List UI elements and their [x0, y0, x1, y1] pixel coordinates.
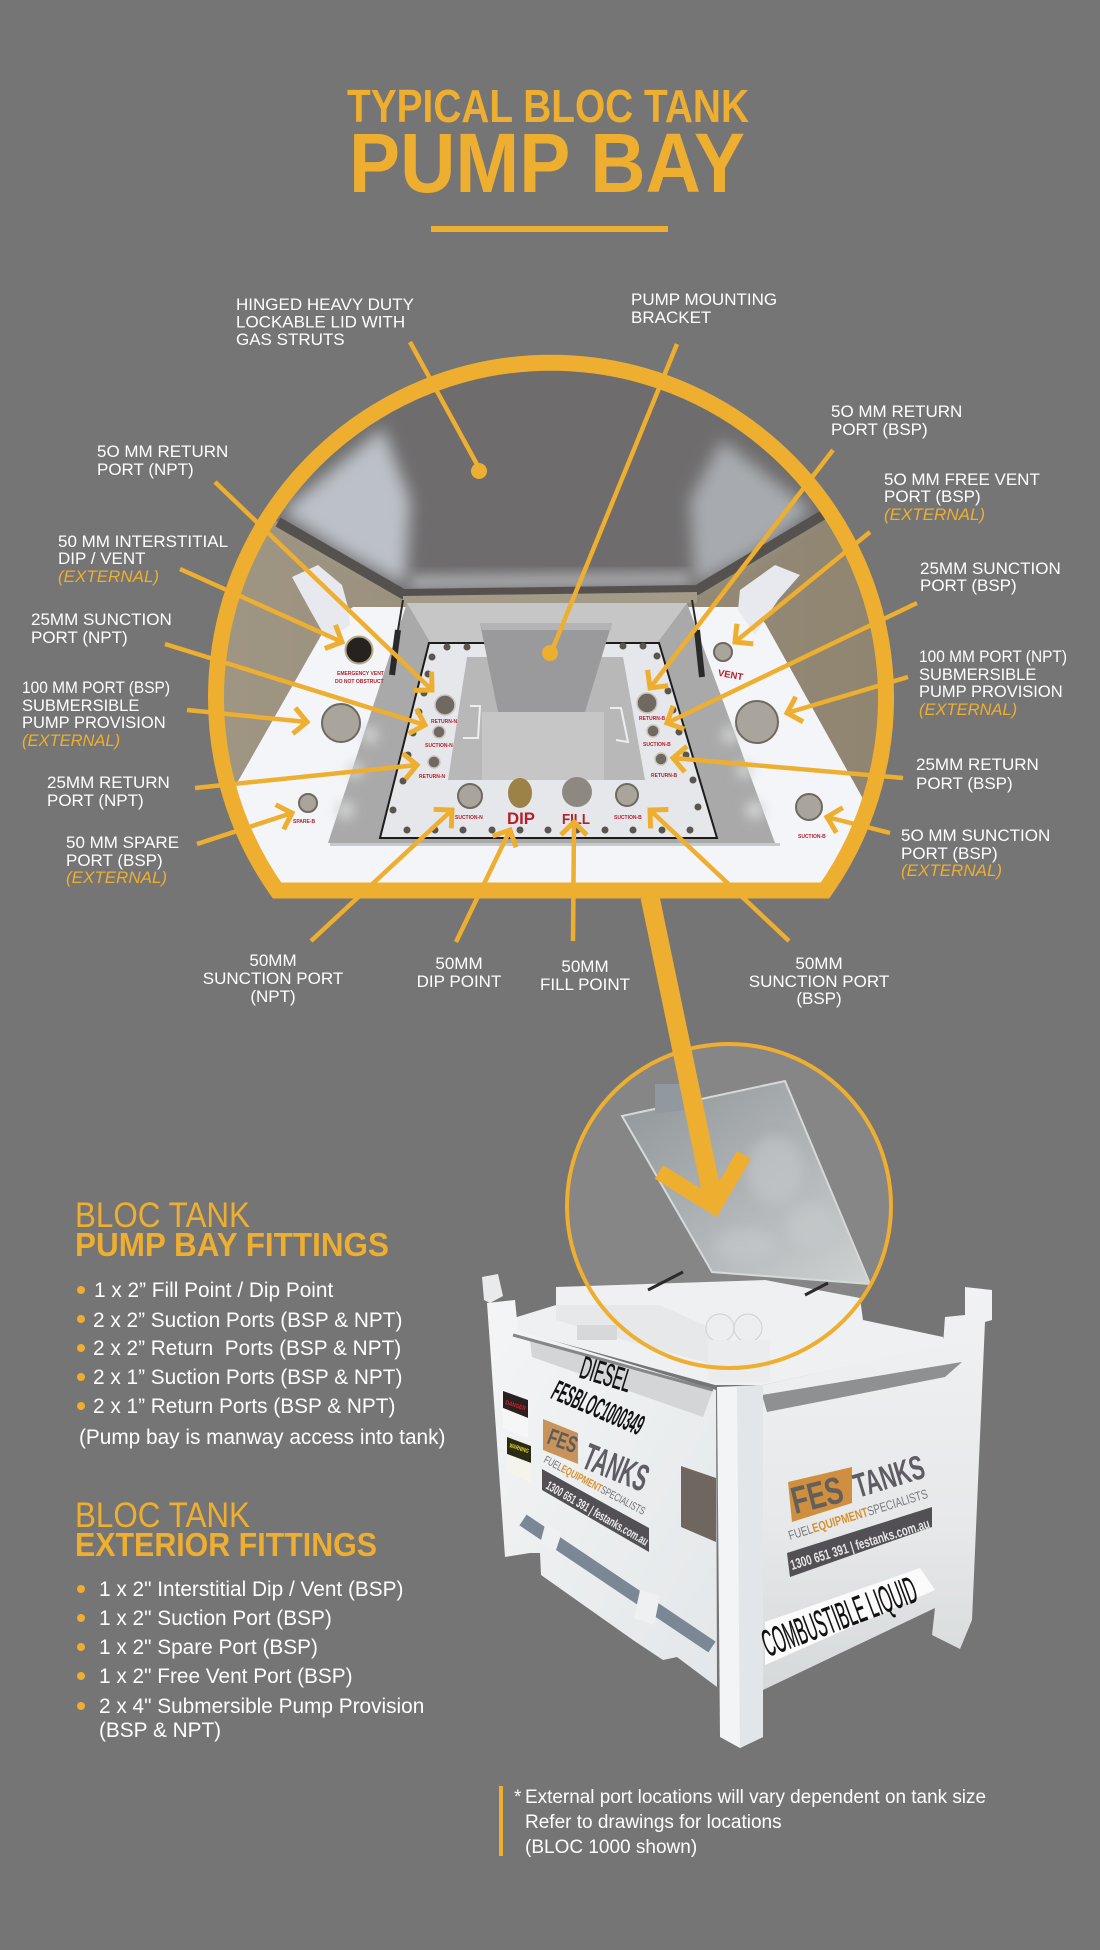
bullets [77, 1286, 85, 1410]
magnifier ring [567, 1044, 891, 1368]
label: suction NPT 50: SUNCTION PORT [203, 969, 343, 988]
arrow: dip [456, 830, 510, 942]
tank: pipe clamps [540, 1525, 660, 1625]
label: 100 mm NPT: SUBMERSIBLE [919, 666, 1036, 684]
tank: right shadow band [762, 1362, 962, 1412]
photo: well wall blobs [336, 727, 764, 819]
photo: small stencils: SUCTION-N [455, 815, 483, 821]
tank: right lower strip [765, 1568, 935, 1665]
label: suction BSP 50: 50MM [795, 954, 843, 973]
label: 100 mm NPT: (EXTERNAL) [919, 701, 1017, 719]
photo: emergency vent [346, 636, 372, 664]
footnote [514, 1787, 986, 1858]
photo: gas struts [392, 600, 702, 677]
label: hinged lid: GAS STRUTS [236, 330, 345, 349]
tank: deck recess shade [556, 1305, 715, 1365]
photo: handles [463, 706, 628, 742]
label: suction NPT 50: (NPT) [250, 987, 296, 1006]
heading: BLOC TANK [75, 1496, 250, 1535]
tank: logo FES right [788, 1467, 852, 1522]
panel: pump bay fittings [75, 1196, 445, 1449]
photo: open lid underside [276, 370, 820, 589]
photo: stencil VENT: VENT [717, 668, 744, 683]
photo: small fittings [428, 693, 667, 768]
arrow: return BSP 25 [673, 758, 903, 778]
tank text: DIESEL: DIESEL [576, 1349, 636, 1399]
labels: bottom [203, 951, 889, 1008]
tank: top deck [507, 1280, 945, 1385]
label: suction NPT 50: 50MM [249, 951, 297, 970]
labels: top [236, 290, 962, 439]
tank: warning panel [507, 1454, 531, 1483]
photo: tank opening [448, 657, 645, 780]
list text: 2 x 4" Submersible Pump Provision [99, 1695, 424, 1718]
label: return port BSP: 5O MM RETURN [831, 402, 962, 421]
photo: small stencils: RETURN-B [639, 716, 665, 722]
arrow: return BSP [650, 450, 833, 688]
label: suction BSP external: PORT (BSP) [901, 844, 998, 863]
lid panel [622, 1081, 870, 1284]
label: free vent: PORT (BSP) [884, 487, 981, 506]
photo: small stencils: DO NOT OBSTRUCT [335, 679, 384, 685]
label: interstitial: 50 MM INTERSTITIAL [58, 532, 228, 551]
label: 100 mm BSP: (EXTERNAL) [22, 732, 120, 750]
magnifier: opened lid [567, 1044, 891, 1368]
arrow: suction BSP [667, 603, 917, 723]
arrow: spare [197, 813, 292, 844]
list text: 2 x 2” Suction Ports (BSP & NPT) [93, 1309, 402, 1332]
tank: left grey band [530, 1340, 713, 1417]
photo: pump mounting bracket [480, 623, 612, 712]
arrow: 100 mm BSP [187, 710, 307, 722]
title: PUMP BAY [349, 116, 745, 210]
photo: lid hinge frame [278, 515, 823, 594]
label: suction BSP 25: PORT (BSP) [920, 576, 1017, 595]
label: return NPT 25: 25MM RETURN [47, 773, 170, 792]
label: spare port: (EXTERNAL) [66, 868, 167, 887]
photo: small stencils: SUCTION-B [643, 742, 671, 748]
arrow: interstitial [180, 569, 342, 642]
label: dip point: DIP POINT [417, 972, 501, 991]
tank text: FES left: FES [544, 1423, 581, 1458]
arrow: free vent [735, 532, 870, 642]
heading [75, 1496, 377, 1564]
list text: 2 x 2” Return Ports (BSP & NPT) [93, 1337, 401, 1360]
tank: compliance plate [681, 1466, 716, 1542]
title [347, 80, 749, 210]
labels: left side [22, 442, 228, 887]
label: pump mounting bracket: BRACKET [631, 308, 711, 327]
label: hinged lid: LOCKABLE LID WITH [236, 312, 405, 332]
labels: right side [884, 470, 1067, 880]
tank: centre post [717, 1385, 763, 1748]
title underline [431, 226, 668, 232]
arrow: return NPT [215, 482, 432, 690]
footnote: External port locations will vary dependent on tank size [525, 1787, 986, 1808]
pointer: lid [410, 342, 487, 479]
photo: deck step [330, 843, 780, 846]
photo: small stencils: SPARE-B [293, 819, 316, 825]
tank: phone bar right [787, 1507, 932, 1577]
label: dip point: 50MM [435, 954, 483, 973]
footnote: * [514, 1787, 522, 1808]
label: suction BSP 25: 25MM SUNCTION [920, 559, 1061, 578]
photo: lid lip [403, 592, 697, 606]
list text: 1 x 2" Free Vent Port (BSP) [99, 1665, 353, 1688]
pointer: bracket [542, 344, 677, 661]
tank text: danger: DANGER [504, 1400, 527, 1413]
photo: large plugs [299, 643, 822, 820]
label: suction port NPT: PORT (NPT) [31, 628, 128, 647]
tank: centre corner lugs [706, 1314, 762, 1342]
list text: 2 x 1” Suction Ports (BSP & NPT) [93, 1366, 402, 1389]
list text: 1 x 2” Fill Point / Dip Point [94, 1279, 333, 1302]
photo: lifting lug left [292, 565, 350, 640]
label: suction port NPT: 25MM SUNCTION [31, 610, 172, 629]
photo: bloc tank [482, 1274, 992, 1748]
heading [75, 1196, 389, 1264]
label: 100 mm BSP: PUMP PROVISION [22, 714, 166, 732]
tank: notch block [577, 1325, 617, 1340]
photo: small stencils: SUCTION-B [614, 815, 642, 821]
title: TYPICAL BLOC TANK [347, 80, 749, 132]
tank text: phone left: 1300 651 391 | festanks.com.au [544, 1478, 651, 1549]
label: free vent: 5O MM FREE VENT [884, 470, 1040, 489]
arrow: suction external [827, 817, 890, 833]
label: suction BSP 50: SUNCTION PORT [749, 972, 889, 991]
photo: bloc tank: FESBLOC1000349 [547, 1375, 648, 1442]
label: 100 mm NPT: 100 MM PORT (NPT) [919, 648, 1067, 666]
tank: centre post shade [737, 1385, 763, 1748]
label: return port NPT: PORT (NPT) [97, 460, 194, 479]
label: 100 mm BSP: 100 MM PORT (BSP) [22, 679, 170, 697]
label: interstitial: (EXTERNAL) [58, 567, 159, 586]
magnifier background [568, 1045, 890, 1367]
arrow: return NPT 25 [195, 765, 417, 788]
photo: flange plate [380, 643, 717, 838]
tank: danger sign [503, 1391, 528, 1418]
tank text: FES right: FES [787, 1469, 848, 1523]
arrow: suction BSP 50 [650, 810, 789, 941]
photo: stencil FILL: FILL [562, 811, 590, 828]
photo: small stencils: SUCTION-B [798, 834, 826, 840]
gas strut right [805, 1283, 828, 1295]
list text: 1 x 2" Suction Port (BSP) [99, 1607, 332, 1630]
arch frame [216, 363, 886, 890]
label: fill point: 50MM [561, 957, 609, 976]
label: return port NPT: 5O MM RETURN [97, 442, 228, 461]
tank: left face and post [487, 1300, 717, 1687]
gas strut left [648, 1272, 683, 1290]
label: suction BSP external: (EXTERNAL) [901, 861, 1002, 880]
label: suction BSP external: 5O MM SUNCTION [901, 826, 1050, 845]
tank: phone bar left [542, 1469, 649, 1552]
label: 100 mm NPT: PUMP PROVISION [919, 683, 1063, 701]
photo: small stencils: RETURN-N [431, 719, 457, 725]
panel: exterior fittings [75, 1496, 424, 1742]
label: hinged lid: HINGED HEAVY DUTY [236, 295, 414, 314]
heading: PUMP BAY FITTINGS [75, 1227, 389, 1264]
tank text: specialists right: FUELEQUIPMENTSPECIALISTS [786, 1486, 930, 1543]
photo: lifting lug right [738, 565, 800, 635]
footnote: (BLOC 1000 shown) [525, 1837, 697, 1858]
list text: 1 x 2" Interstitial Dip / Vent (BSP) [99, 1578, 403, 1601]
tank text: specialists left: FUELEQUIPMENTSPECIALISTS [542, 1454, 647, 1518]
list text: (Pump bay is manway access into tank) [79, 1426, 445, 1449]
label: return BSP 25: 25MM RETURN [916, 755, 1039, 774]
photo: small stencils: SUCTION-N [425, 743, 453, 749]
photo: bracket rim [480, 623, 612, 630]
tank: danger panel [503, 1408, 528, 1438]
photo: small stencils: RETURN-B [651, 773, 677, 779]
tank: logo FES left [543, 1419, 578, 1464]
arrow: fill [573, 822, 574, 941]
tank text: TANKS right: TANKS [849, 1448, 929, 1506]
tank: centre lug base [708, 1340, 770, 1382]
footnote bar [499, 1786, 503, 1856]
photo: small stencils: EMERGENCY VENT [337, 671, 384, 677]
label: spare port: 50 MM SPARE [66, 833, 179, 852]
arrow: suction NPT [165, 644, 425, 725]
tank: left lug [482, 1274, 503, 1303]
tank text: phone right: 1300 651 391 | festanks.com.au [788, 1515, 932, 1573]
bullets [77, 1585, 85, 1710]
photo: flange bolts [390, 642, 702, 834]
label: pump mounting bracket: PUMP MOUNTING [631, 290, 777, 309]
label: return port BSP: PORT (BSP) [831, 420, 928, 439]
tank: right face and post [763, 1287, 992, 1690]
label: interstitial: DIP / VENT [58, 549, 146, 568]
list text: 2 x 1” Return Ports (BSP & NPT) [93, 1395, 395, 1418]
label: return BSP 25: PORT (BSP) [916, 774, 1013, 793]
list text [99, 1578, 424, 1742]
heading: EXTERIOR FITTINGS [75, 1527, 377, 1564]
photo: small stencils: RETURN-N [419, 774, 445, 780]
list text: 1 x 2" Spare Port (BSP) [99, 1636, 318, 1659]
label: spare port: PORT (BSP) [66, 851, 163, 870]
list text: (BSP & NPT) [99, 1719, 221, 1742]
label: fill point: FILL POINT [540, 975, 630, 994]
tank: fork pipe [523, 1520, 712, 1647]
arrow: 100 mm NPT [787, 677, 908, 713]
tank: warning sign [507, 1437, 531, 1463]
pointer arrows [165, 342, 917, 942]
list text [79, 1279, 445, 1449]
tank: left dark line [513, 1335, 713, 1390]
photo: ground [224, 520, 878, 798]
label: return NPT 25: PORT (NPT) [47, 791, 144, 810]
photo: tank floor [482, 712, 604, 780]
photo: well back wall [407, 603, 687, 642]
photo: white deck [236, 607, 862, 882]
photo: fill cap [562, 777, 592, 807]
photo: small stencils [293, 671, 826, 840]
tank text: warning: WARNING [508, 1443, 529, 1455]
photo: stencil DIP: DIP [507, 809, 535, 828]
photo: pump well walls [328, 603, 775, 843]
big arrow from arch to tank [650, 897, 744, 1206]
photo: dip cap [508, 778, 532, 808]
photo: open pump bay inside arch [224, 371, 878, 882]
label: 100 mm BSP: SUBMERSIBLE [22, 697, 139, 715]
heading: BLOC TANK [75, 1196, 250, 1235]
label: free vent: (EXTERNAL) [884, 505, 985, 524]
label: suction BSP 50: (BSP) [796, 989, 842, 1008]
arrow: suction NPT 50 [311, 810, 452, 941]
tank text: TANKS left: TANKS [577, 1436, 654, 1500]
footnote: Refer to drawings for locations [525, 1812, 782, 1833]
